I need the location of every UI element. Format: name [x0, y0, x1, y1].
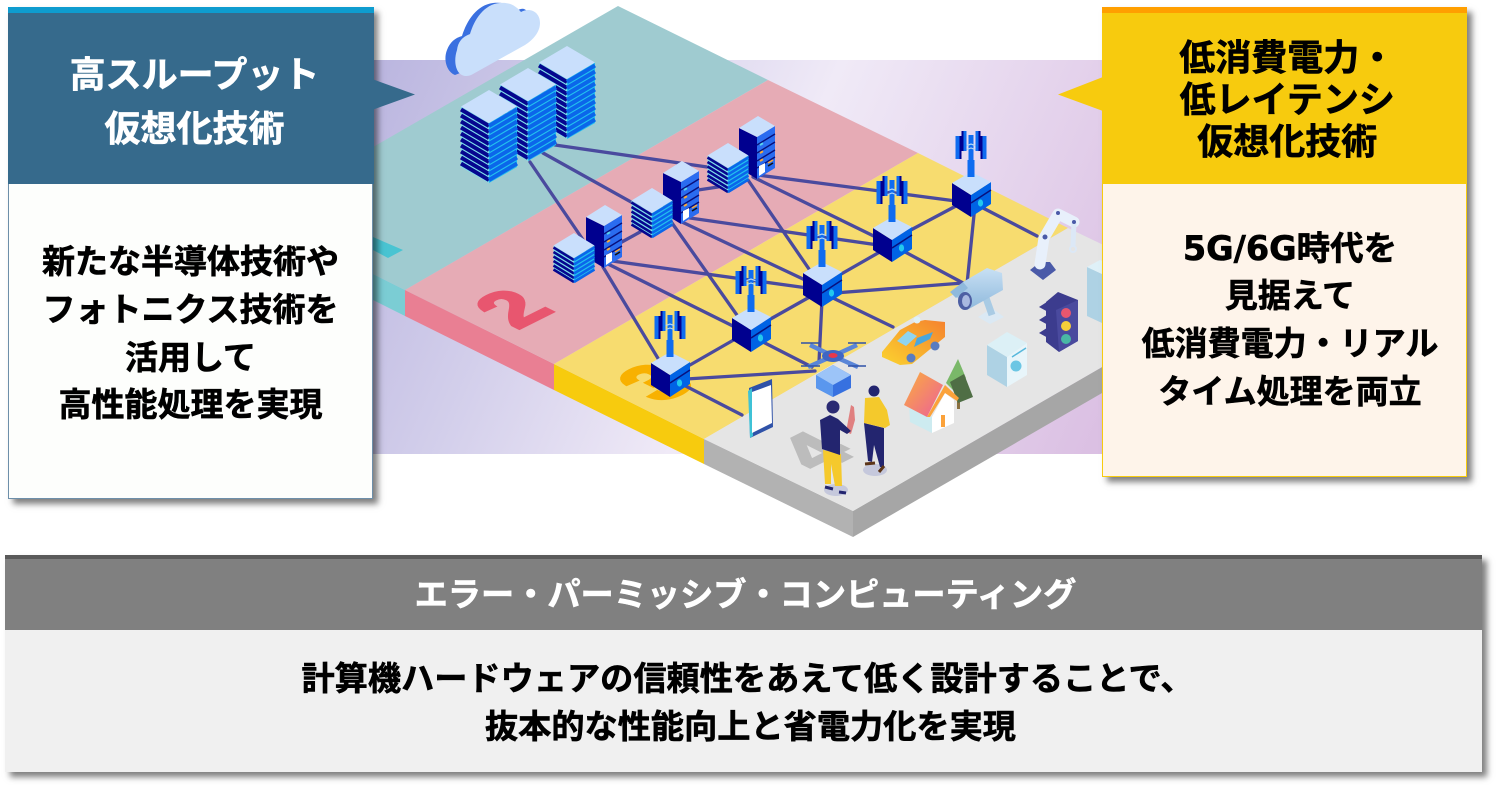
heading: error permissive computing — [5, 559, 1482, 630]
text block: left description: 高性能処理を実現 — [58, 385, 322, 424]
heading: error permissive computing: エラー・パーミッシブ・コンピューティング — [415, 575, 1076, 614]
heading: high throughput — [8, 12, 374, 184]
text block: left description: 活用して — [125, 338, 256, 377]
panel: low power low latency — [1102, 7, 1466, 477]
text block: right description: 低消費電力・リアル — [1142, 324, 1438, 363]
zone number 4: 4 — [755, 422, 874, 481]
base station 3 — [803, 221, 842, 307]
text block: right description: タイム処理を両立 — [1158, 372, 1422, 411]
text block: bottom description: 抜本的な性能向上と省電力化を実現 — [485, 707, 1016, 746]
heading: high throughput: 高スループット — [70, 54, 319, 96]
base station 4 — [873, 176, 912, 262]
edge server 2 — [632, 161, 699, 238]
icon: house — [904, 372, 959, 433]
edge server 1 — [554, 205, 622, 283]
people — [820, 386, 890, 496]
network links — [530, 145, 1037, 415]
text block: right description: 5G/6G時代を — [1183, 229, 1397, 268]
icon: smartphone — [748, 379, 773, 438]
text block: left description: 新たな半導体技術や — [42, 242, 339, 281]
panel: error permissive computing — [5, 555, 1482, 772]
text block: right description: 見据えて — [1225, 276, 1355, 315]
zone number 2: 2 — [453, 279, 571, 338]
icon: security camera — [950, 268, 1004, 324]
heading: high throughput: 仮想化技術 — [104, 108, 284, 150]
text block: left description — [42, 242, 339, 424]
callout pointer — [1058, 77, 1102, 111]
text block: bottom description — [301, 659, 1194, 746]
edge server 3 — [708, 116, 775, 193]
heading: low power low latency: 仮想化技術 — [1197, 122, 1377, 162]
text block: bottom description: 計算機ハードウェアの信頼性をあえて低く設計することで、 — [301, 659, 1194, 698]
panel accent bar — [1102, 6, 1467, 12]
icon: drone with parcel — [801, 343, 866, 397]
icon: traffic light — [1039, 292, 1078, 352]
base station 5 — [952, 131, 991, 217]
heading: low power low latency: 低レイテンシ — [1180, 80, 1395, 120]
background gradient band — [370, 60, 1105, 454]
panel accent bar — [8, 6, 374, 12]
icon: tree — [946, 359, 973, 409]
callout pointer — [374, 80, 415, 110]
panel accent bar — [5, 555, 1482, 559]
heading: low power low latency — [1102, 12, 1467, 184]
data center servers — [461, 46, 595, 183]
icon: robot arm — [1030, 211, 1076, 280]
icon: washing machine — [987, 332, 1027, 387]
base station 2 — [732, 266, 771, 352]
zone number 1 — [373, 237, 403, 258]
icon: autonomous car — [882, 316, 945, 365]
text block: left description: フォトニクス技術を — [42, 290, 338, 329]
platform — [255, 6, 1218, 537]
heading: low power low latency: 低消費電力・ — [1179, 38, 1395, 78]
zone number 3: 3 — [596, 353, 714, 412]
text block: right description — [1142, 229, 1438, 411]
base station 1 — [651, 311, 690, 397]
icon: refrigerator — [1087, 260, 1102, 323]
panel: high throughput — [8, 7, 373, 499]
icon: cloud — [445, 3, 540, 76]
